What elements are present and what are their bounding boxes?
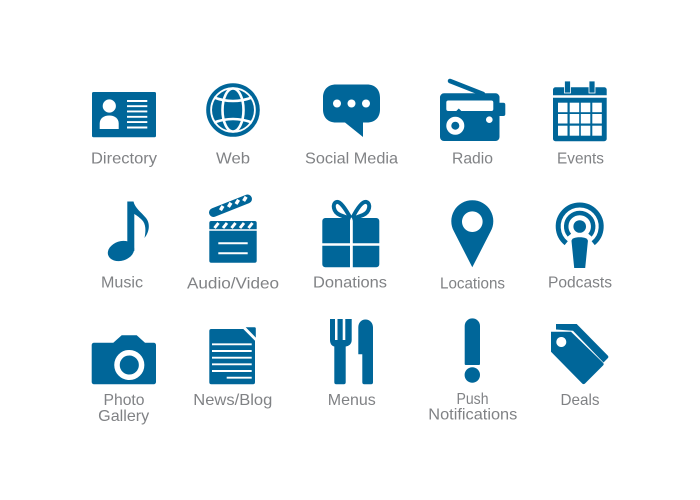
label: Podcasts: Podcasts: [548, 275, 612, 292]
icon: camera: [92, 335, 156, 384]
label: Push Notifications: [428, 391, 517, 424]
label: Photo Gallery: Photo: [104, 392, 145, 409]
label: Locations: Locations: [440, 276, 505, 293]
icon: exclamation mark: [465, 318, 480, 383]
icon: gift box: [322, 202, 379, 267]
label: Push Notifications: Notifications: [428, 407, 517, 424]
label: Social Media: Social Media: [305, 150, 398, 167]
icon: music note: [105, 202, 149, 264]
label: Push Notifications: Push: [456, 391, 488, 408]
label: Web: Web: [216, 150, 250, 167]
icon: speech bubble: [323, 84, 380, 137]
icon: radio: [440, 81, 505, 141]
label: Events: Events: [557, 150, 604, 167]
icon: clapperboard: [209, 197, 257, 263]
label: Photo Gallery: Gallery: [98, 408, 149, 425]
icon: location pin: [451, 200, 493, 267]
icon: news document: [209, 327, 256, 384]
icon: directory card: [92, 92, 156, 137]
label: Audio/Video: Audio/Video: [187, 276, 279, 293]
label: Music: Music: [101, 275, 143, 292]
label: Donations: Donations: [313, 274, 387, 291]
label: Directory: Directory: [91, 150, 157, 167]
label: Photo Gallery: [98, 392, 149, 425]
icon: price tags: [551, 324, 608, 384]
icon: calendar: [553, 81, 607, 141]
label: Menus: Menus: [328, 392, 376, 409]
label: Deals: Deals: [560, 392, 600, 409]
label: Radio: Radio: [452, 150, 493, 167]
icon: web globe: [208, 85, 258, 135]
label: News/Blog: News/Blog: [193, 392, 272, 409]
icon: podcast: [558, 205, 601, 268]
icon: fork and knife: [330, 319, 373, 384]
